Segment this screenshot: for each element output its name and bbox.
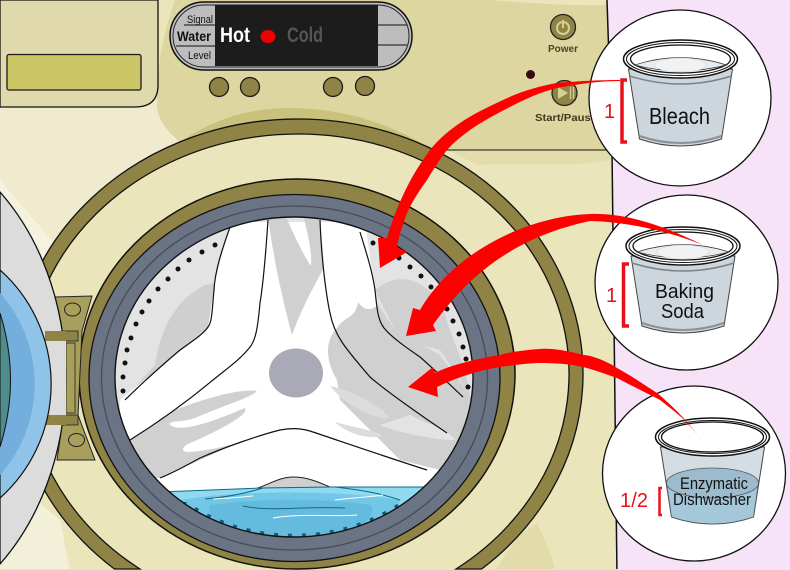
amount: 1: 1 (604, 101, 615, 123)
label: Baking Soda: Soda (661, 301, 705, 323)
drum hub (269, 348, 323, 398)
status LED (526, 70, 535, 79)
drawer handle (7, 54, 141, 90)
inner olive ring (79, 179, 515, 569)
power button (548, 14, 578, 55)
bracket: 1 (624, 264, 629, 326)
display label: Signal: Signal (187, 14, 213, 26)
panel buttons (210, 76, 374, 96)
display label: Water: Water (177, 28, 211, 44)
label: Enzymatic Dishwasher: Enzymatic (680, 474, 748, 493)
open door (0, 192, 66, 564)
cup: enzymatic dishwasher detergent (656, 418, 770, 524)
arrow: dishwasher detergent into drum (408, 349, 712, 455)
label: Bleach: Bleach (649, 103, 710, 129)
grey wisp lower centre (330, 386, 390, 418)
label: Baking Soda: Baking (655, 281, 714, 303)
power button: Power (548, 44, 578, 55)
vane outlines (125, 220, 463, 478)
arrow: baking soda into drum (406, 214, 703, 336)
washing machine body (0, 0, 617, 570)
cup: baking soda (626, 227, 740, 333)
amount: 1: 1 (606, 285, 617, 307)
circle: bleach (589, 10, 771, 186)
door hinge (45, 296, 95, 460)
white drum vanes (120, 222, 439, 491)
drum perforations (120, 240, 470, 394)
bracket: 1 (622, 80, 627, 142)
door glass inner (0, 313, 10, 447)
grey wedge lower left (130, 391, 257, 478)
display: Hot: Hot (220, 24, 250, 47)
display: Cold: Cold (287, 24, 323, 47)
grey drum shading left (134, 283, 214, 388)
door glass (0, 270, 51, 498)
garment hump (256, 476, 330, 488)
circle: enzymatic dishwasher (602, 386, 786, 561)
cup: bleach (624, 40, 738, 146)
water (170, 486, 423, 536)
start pause button (535, 80, 597, 124)
circle: baking soda (595, 195, 778, 370)
drum interior (116, 218, 472, 536)
bracket: 1/2 (660, 488, 662, 515)
grey swath right (328, 302, 480, 470)
outer door ring (13, 119, 583, 569)
display label: Level: Level (188, 50, 211, 62)
label: Enzymatic Dishwasher: Dishwasher (673, 490, 751, 509)
arrow: bleach into drum (378, 80, 620, 268)
display panel (170, 2, 412, 70)
grey swath top (268, 215, 324, 335)
amount: 1/2: 1/2 (620, 490, 648, 512)
grey door seal (89, 194, 500, 562)
start pause button: Start/Pause (535, 113, 597, 124)
indicator light (260, 30, 276, 43)
